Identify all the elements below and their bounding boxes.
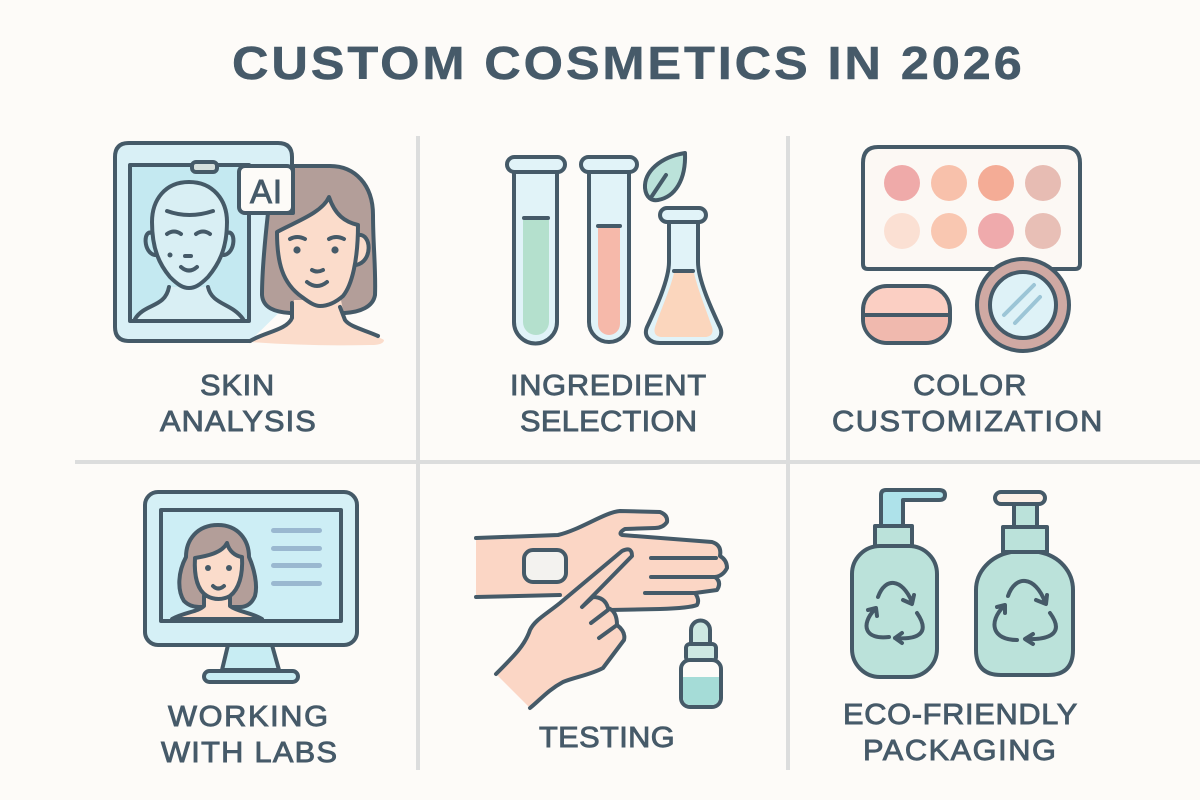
label: color customization [832, 370, 1102, 438]
title: CUSTOM COSMETICS IN 2026 [232, 38, 1022, 89]
icon: monitor [145, 492, 357, 682]
icon: pointing hand [496, 549, 632, 708]
panel: eco-friendly packaging [843, 490, 1077, 767]
icon: open hand and arm [476, 511, 727, 610]
icon: recycle arrows right [994, 581, 1056, 644]
icon: right pump bottle [976, 492, 1073, 675]
label: working with labs: WITH LABS [161, 737, 337, 769]
icon: flask [646, 208, 721, 343]
icon: compact [863, 286, 950, 343]
label: eco-friendly packaging: ECO-FRIENDLY [843, 699, 1077, 731]
panel: color customization [832, 147, 1102, 438]
label: ingredient selection [510, 370, 706, 438]
label: working with labs [161, 701, 337, 769]
icon: left pump bottle [852, 490, 945, 677]
label: ingredient selection: INGREDIENT [510, 370, 706, 402]
panel: testing [476, 511, 727, 754]
icon: recycle arrows left [867, 583, 923, 643]
icon: green test tube [507, 157, 565, 344]
label: skin analysis: ANALYSIS [160, 406, 316, 438]
icon: leaf [645, 153, 685, 200]
label: eco-friendly packaging: PACKAGING [863, 735, 1056, 767]
icon: woman on screen [163, 525, 339, 621]
label: color customization: COLOR [913, 370, 1026, 402]
label: eco-friendly packaging [843, 699, 1077, 767]
icon: AI badge: AI [250, 173, 282, 210]
label: ingredient selection: SELECTION [520, 406, 697, 438]
icon: mirror [977, 259, 1069, 351]
icon: tablet with scanned face [115, 143, 292, 341]
label: working with labs: WORKING [168, 701, 328, 733]
label: color customization: CUSTOMIZATION [832, 406, 1102, 438]
label: skin analysis [160, 370, 316, 438]
icon: AI badge [239, 166, 293, 213]
icon: woman portrait [250, 166, 384, 345]
label: testing: TESTING [539, 722, 675, 754]
icon: palette [863, 147, 1080, 269]
icon: pink test tube [581, 157, 637, 342]
panel: skin analysis [115, 143, 384, 438]
panel: working with labs [145, 492, 357, 769]
label: skin analysis: SKIN [200, 370, 274, 402]
icon: text lines [271, 528, 322, 586]
panel: ingredient selection [507, 153, 721, 438]
icon: serum bottle [681, 620, 721, 707]
icon: skin patch [524, 550, 566, 582]
